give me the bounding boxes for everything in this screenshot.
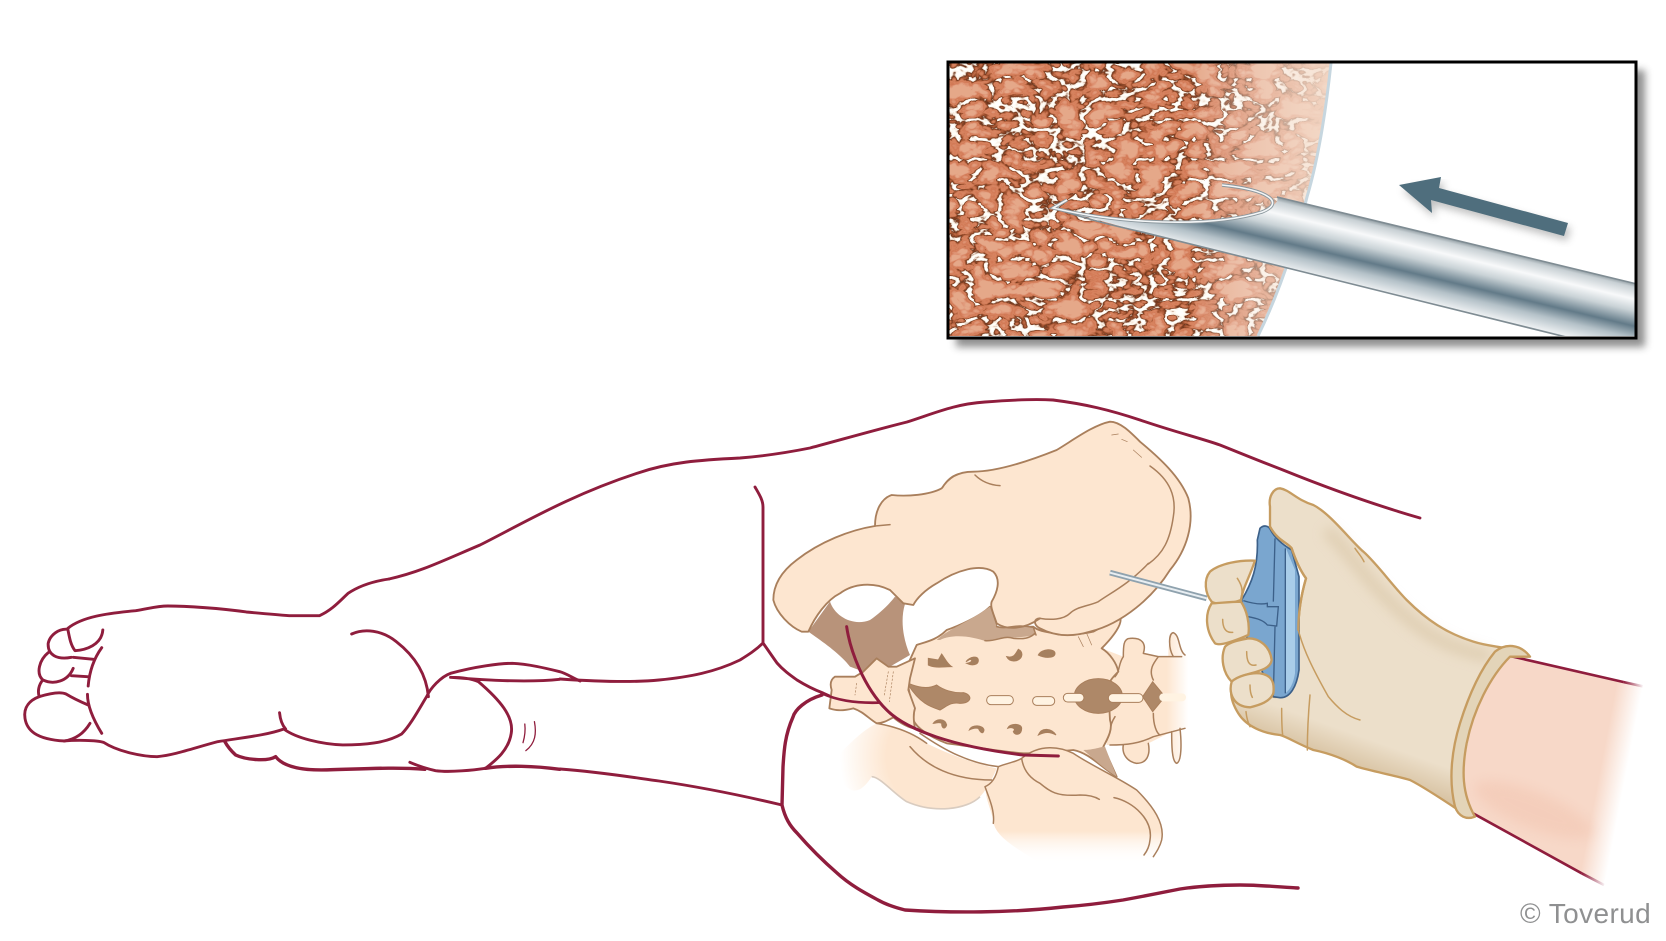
cancellous bone texture: [948, 62, 1338, 340]
middle finger: [1207, 602, 1249, 644]
glove back shading: [1327, 530, 1490, 657]
lumbar outlines: [1105, 633, 1185, 763]
biopsy needle in bone: [1110, 573, 1207, 598]
glove creases: [1223, 548, 1364, 750]
wrinkles: [523, 722, 535, 751]
lower leg line: [225, 742, 560, 770]
pelvis and spine anatomy: [773, 422, 1207, 863]
direction arrow shadow: [1402, 182, 1571, 241]
ilium inner lines: [875, 466, 1174, 641]
sacrum tan shading: [937, 607, 1035, 642]
direction arrow: [1399, 177, 1568, 236]
handle highlight: [1285, 548, 1295, 693]
sacral foramina: [928, 649, 1056, 735]
small toes: [38, 629, 103, 741]
forearm lower shading: [1468, 769, 1599, 851]
ischium right outlines: [985, 748, 1162, 857]
inset border: [948, 62, 1636, 338]
big toe: [25, 693, 88, 741]
ischium outlines: [877, 723, 998, 780]
red connecting line: [822, 693, 878, 703]
patient body upper contour: [389, 400, 1420, 579]
thumb edge over handle: [1270, 527, 1306, 630]
leg contours: [68, 579, 389, 628]
sacral tan lower wedge: [1083, 747, 1117, 777]
forearm lower red edge fade: [1582, 873, 1604, 885]
little finger: [1231, 673, 1274, 707]
sacrum: [908, 607, 1121, 777]
vertebral gaps: [1074, 679, 1122, 713]
glove cuff: [1451, 646, 1530, 818]
gloved hand holding biopsy needle: [1206, 488, 1645, 885]
stitched joint marks: [855, 672, 893, 702]
handle details: [1243, 538, 1285, 697]
lumbar vertebrae: [1102, 633, 1188, 763]
ischium lower faded edge: [872, 777, 980, 809]
bone surface edge: [1258, 63, 1331, 336]
sole and calf: [64, 663, 580, 757]
ring finger: [1223, 638, 1272, 682]
thigh and back contour: [560, 487, 877, 704]
hip and buttock contour: [782, 695, 1298, 912]
palm of glove: [1231, 488, 1505, 810]
knee: [410, 677, 560, 771]
brown ligament under ilium: [808, 597, 910, 672]
forearm: [1464, 656, 1645, 883]
inset panel: needle entering cancellous bone: [948, 62, 1645, 347]
leg line to hip: [560, 769, 782, 805]
sacral white slits: [987, 693, 1186, 705]
index finger: [1206, 561, 1255, 603]
ilium wing: [773, 422, 1191, 635]
inset drop shadow: [956, 70, 1645, 347]
median sacral crest gap: [908, 683, 970, 710]
ischium right: [986, 748, 1162, 863]
sacrotuberous ligament joint piece: [829, 658, 915, 728]
inset background: [948, 62, 1636, 338]
thigh curve: [280, 631, 428, 729]
ischium left, faded: [836, 723, 997, 809]
blue handle: [1242, 526, 1299, 698]
sciatic nerve red lines: [847, 627, 1058, 756]
copyright credit: © Toverud: [1520, 898, 1651, 929]
needle shaft with bevel: [1053, 185, 1637, 340]
forearm lower red edge: [1470, 812, 1582, 873]
foot and lower legs outline: [25, 579, 580, 771]
forearm upper red edge fade: [1623, 682, 1643, 686]
ilium rim ticks: [1078, 434, 1142, 647]
forearm upper red edge: [1510, 656, 1623, 682]
